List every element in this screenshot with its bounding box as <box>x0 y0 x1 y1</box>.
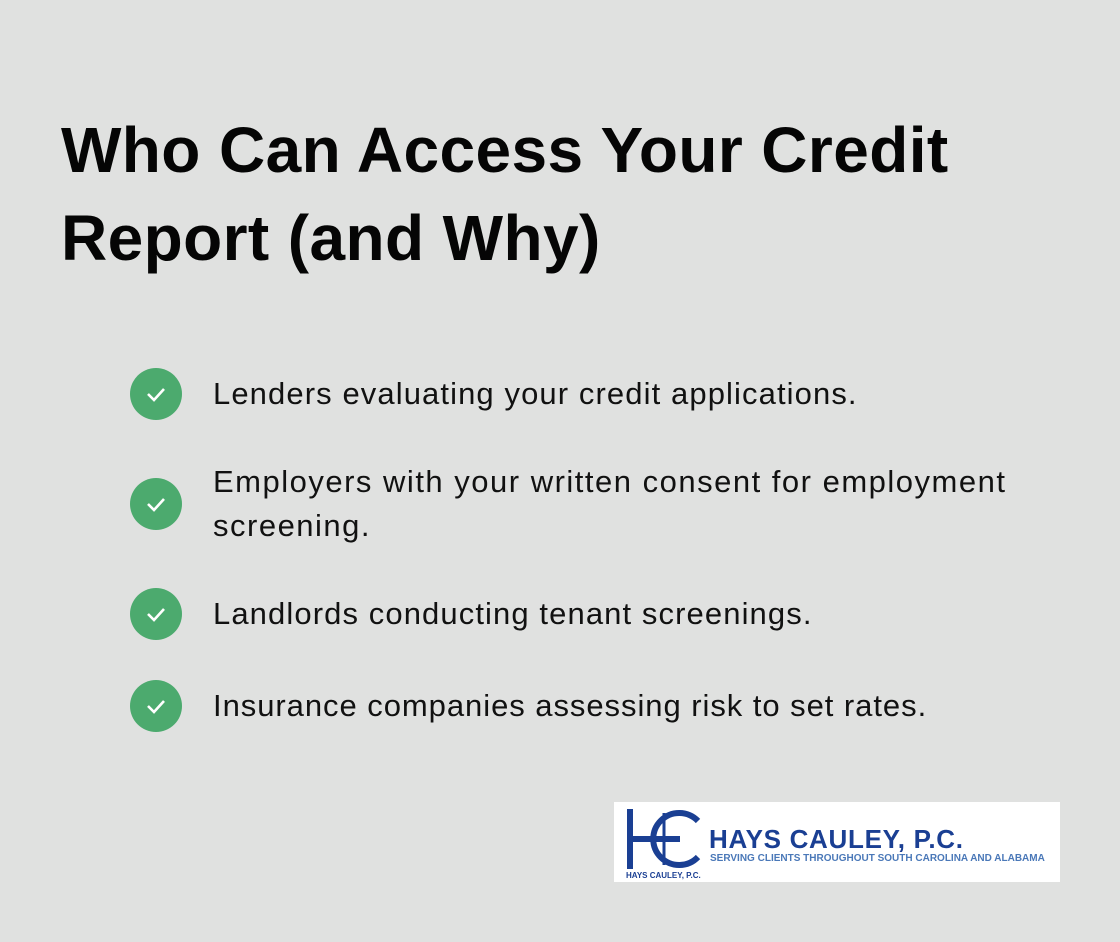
icon: check <box>130 368 182 420</box>
text: Landlords conducting tenant screenings. <box>213 596 813 631</box>
title <box>61 114 949 274</box>
icon: check <box>130 478 182 530</box>
logo tagline: SERVING CLIENTS THROUGHOUT SOUTH CAROLINA AND ALABAMA <box>710 853 1045 864</box>
text: Insurance companies assessing risk to set rates. <box>213 688 927 723</box>
text: Lenders evaluating your credit applications. <box>213 376 858 411</box>
title: Report (and Why) <box>61 202 601 274</box>
logo name: HAYS CAULEY, P.C. <box>709 824 964 854</box>
icon: check <box>130 680 182 732</box>
item: landlords <box>130 588 813 640</box>
icon: check <box>130 588 182 640</box>
logo small text: HAYS CAULEY, P.C. <box>626 871 701 880</box>
item: employers <box>130 464 1006 543</box>
logo mark <box>627 809 700 869</box>
title: Who Can Access Your Credit <box>61 114 949 186</box>
text: Employers with your written consent for employment screening. <box>213 464 1006 543</box>
item: lenders <box>130 368 858 420</box>
item: insurance <box>130 680 927 732</box>
logo <box>614 802 1060 882</box>
